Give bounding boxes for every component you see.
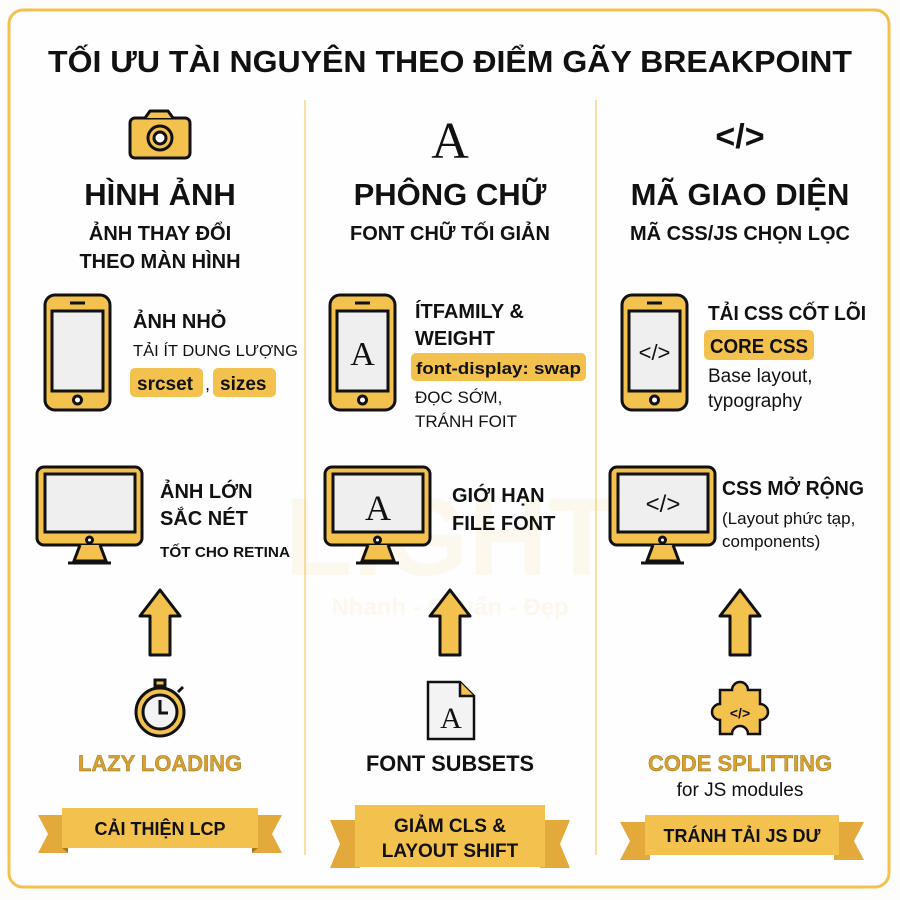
heading: images: HÌNH ẢNH	[84, 177, 236, 212]
ribbon: reduce CLS: GIẢM CLS &	[394, 815, 506, 837]
text: limit font files	[452, 483, 555, 535]
text: extended css	[722, 476, 864, 551]
icon: font file: A	[440, 702, 462, 735]
label: code splitting	[648, 751, 832, 801]
column 3: code	[610, 118, 866, 860]
label: font subsets: FONT SUBSETS	[366, 751, 534, 776]
icon: puzzle: </>	[730, 705, 750, 721]
watermark: LIGHT	[285, 476, 615, 599]
title: TỐI ƯU TÀI NGUYÊN THEO ĐIỂM GÃY BREAKPOINT	[48, 43, 852, 79]
arrow	[720, 590, 760, 655]
text: family weight	[411, 300, 586, 431]
column 2: fonts	[325, 113, 586, 868]
text: core css: CORE CSS	[710, 336, 808, 358]
text: small image: TẢI ÍT DUNG LƯỢNG	[133, 341, 298, 360]
icon: stopwatch	[136, 680, 184, 736]
subtitle: THEO MÀN HÌNH	[79, 250, 241, 273]
ribbon: reduce CLS: LAYOUT SHIFT	[382, 841, 519, 862]
icon: phone with A: A	[350, 336, 375, 373]
text: small image: ẢNH NHỎ	[133, 309, 226, 333]
icon: font file	[428, 682, 474, 739]
text: extended css: CSS MỞ RỘNG	[722, 476, 864, 500]
icon: monitor with code: </>	[646, 491, 680, 518]
text: family weight: WEIGHT	[415, 328, 495, 350]
icon: phone	[45, 295, 110, 410]
icon: phone with A	[330, 295, 395, 410]
text: extended css: (Layout phức tạp,	[722, 509, 855, 528]
icon: letter A: A	[431, 113, 469, 170]
ribbon: avoid extra JS	[620, 815, 864, 860]
text: large image: ẢNH LỚN	[160, 479, 253, 503]
arrow	[140, 590, 180, 655]
heading: fonts: PHÔNG CHỮ	[354, 176, 547, 212]
text: small image: ,	[205, 374, 210, 394]
text: small image: srcset	[137, 374, 194, 395]
label: code splitting: CODE SPLITTING	[648, 751, 832, 776]
text: limit font files: GIỚI HẠN	[452, 483, 545, 507]
heading: code: MÃ GIAO DIỆN	[631, 176, 849, 212]
ribbon: improve LCP	[38, 808, 282, 853]
icon: code brackets: </>	[715, 118, 765, 156]
label: code splitting: for JS modules	[677, 780, 803, 801]
label: lazy loading: LAZY LOADING	[78, 751, 242, 776]
text: small image	[130, 309, 298, 397]
text: family weight: ĐỌC SỚM,	[415, 388, 502, 407]
text: large image: TỐT CHO RETINA	[160, 543, 290, 561]
text: small image: sizes	[220, 374, 266, 395]
text: extended css: components)	[722, 532, 820, 551]
arrow	[430, 590, 470, 655]
icon: monitor with A: A	[365, 488, 391, 528]
ribbon: improve LCP: CẢI THIỆN LCP	[94, 818, 226, 839]
icon: monitor with A	[325, 467, 430, 563]
icon: monitor	[37, 467, 142, 563]
text: large image	[160, 479, 290, 561]
watermark: Nhanh - Chuẩn - Đẹp	[331, 594, 569, 621]
text: core css: TẢI CSS CỐT LÕI	[708, 301, 866, 325]
ribbon: avoid extra JS: TRÁNH TẢI JS DƯ	[664, 825, 821, 846]
text: large image: SẮC NÉT	[160, 506, 248, 530]
text: core css	[704, 301, 866, 412]
subtitle: ẢNH THAY ĐỔI	[89, 221, 231, 245]
icon: phone with code	[622, 295, 687, 410]
text: family weight: font-display: swap	[416, 359, 581, 378]
text: family weight: ÍTFAMILY &	[415, 300, 524, 323]
subtitle	[79, 221, 241, 273]
text: core css: typography	[708, 391, 803, 412]
icon: phone with code: </>	[639, 340, 670, 365]
icon: puzzle	[712, 682, 768, 734]
text: core css: Base layout,	[708, 366, 813, 387]
icon: monitor with code	[610, 467, 715, 563]
ribbon: reduce CLS	[330, 805, 570, 868]
text: family weight: TRÁNH FOIT	[415, 412, 517, 431]
text: limit font files: FILE FONT	[452, 513, 555, 535]
icon: camera	[130, 111, 190, 158]
column 1: images	[37, 111, 298, 853]
subtitle: MÃ CSS/JS CHỌN LỌC	[630, 222, 850, 245]
subtitle: FONT CHỮ TỐI GIẢN	[350, 221, 550, 245]
